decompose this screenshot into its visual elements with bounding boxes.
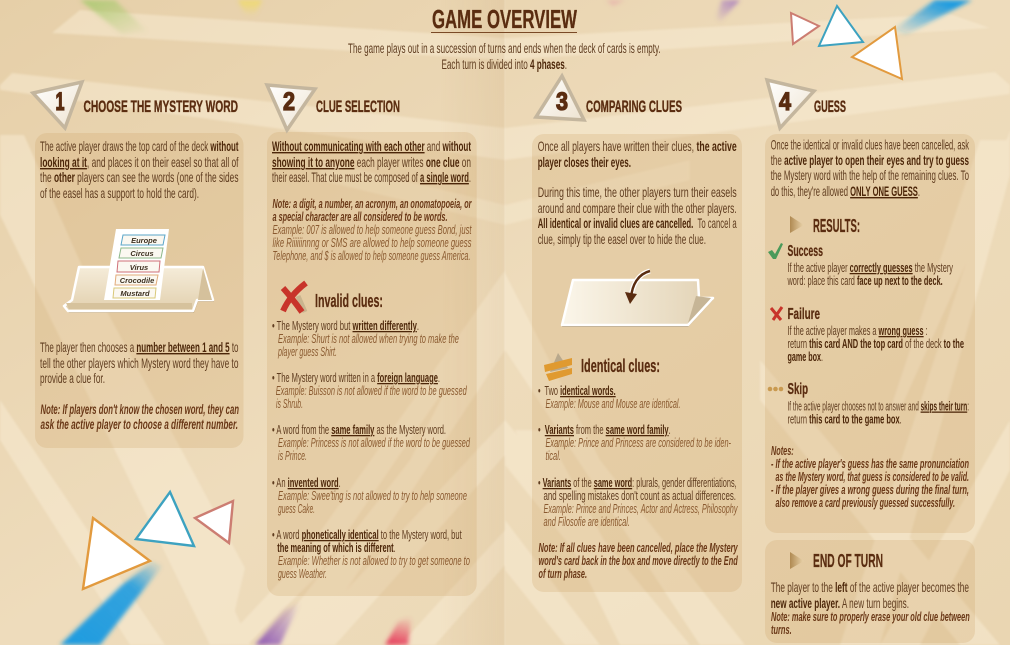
- title: GAME OVERVIEW: [432, 4, 577, 34]
- heading: choose the mystery word: CHOOSE THE MYSTERY WORD: [84, 97, 238, 116]
- result: skip: [788, 381, 969, 426]
- icon: red cross: [283, 283, 306, 312]
- identical clues list: tical.: [546, 449, 561, 463]
- identical clues list: • Variants from the same word family.: [538, 422, 671, 437]
- icon: red cross small: [771, 307, 782, 320]
- invalid clues list: Example: Shurt is not allowed when trying to make the: [278, 332, 459, 346]
- badge: step 2: [267, 85, 315, 130]
- top-right coloured triangles: [791, 6, 902, 79]
- invalid clues list: Example: Whether is not allowed to try to get someone to: [278, 554, 470, 568]
- icon: results arrow: [790, 216, 804, 233]
- icon: end of turn arrow: [790, 552, 804, 569]
- identical clues list: • Two identical words.: [538, 383, 616, 398]
- note and example: Note: a digit, a number, an acronym, an onomatopoeia, or: [272, 197, 472, 211]
- invalid clues list: • The Mystery word written in a foreign language.: [272, 370, 440, 385]
- heading: clue selection: CLUE SELECTION: [316, 97, 400, 116]
- heading: guess: GUESS: [814, 97, 846, 116]
- note and example: Example: 007 is allowed to help someone guess Bond, just: [272, 223, 472, 237]
- badge: step 1: 1: [56, 88, 65, 116]
- heading: comparing clues: COMPARING CLUES: [586, 97, 682, 116]
- body text: [538, 138, 737, 247]
- body text: Once all players have written their clues, the active: [538, 138, 737, 154]
- invalid clues list: is Prince.: [278, 449, 307, 463]
- invalid clues list: • A word from the same family as the Mystery word.: [272, 422, 446, 437]
- heading: invalid clues: Invalid clues:: [315, 291, 383, 311]
- identical clues list: and spelling mistakes don't count as actual differences.: [544, 488, 736, 503]
- invalid clues list: Example: Princess is not allowed if the word to be guessed: [278, 436, 471, 450]
- result: success: If the active player correctly guesses the Mystery: [788, 260, 953, 275]
- notes: [771, 444, 969, 510]
- identical clues list: Example: Prince and Princess are considered to be iden-: [546, 436, 731, 450]
- note: of turn phase.: [538, 567, 587, 581]
- body text: the other players can see the words (one of the sides: [40, 169, 238, 185]
- invalid clues list: • The Mystery word but written differently.: [272, 318, 419, 333]
- result: success: Success: [788, 243, 823, 260]
- result: skip: return this card to the game box.: [788, 412, 902, 426]
- result: failure: game box.: [788, 349, 823, 364]
- body text: of the easel has a support to hold the card).: [40, 185, 199, 201]
- result: failure: If the active player makes a wrong guess :: [788, 323, 928, 338]
- body text: number choice: tell the other players which Mystery word they have to: [40, 355, 239, 371]
- note and example: Telephone, and $ is allowed to help someone guess America.: [272, 249, 470, 263]
- identical clues list: [538, 383, 738, 529]
- icon: three dots: [768, 387, 783, 391]
- intro text: Each turn is divided into 4 phases.: [442, 57, 567, 72]
- badge: step 4: [767, 80, 814, 128]
- badge: step 1: [33, 82, 82, 128]
- body text: showing it to anyone each player writes one clue on: [272, 154, 471, 170]
- illustration: tipped easel with arrow: [562, 271, 713, 327]
- body text: Without communicating with each other and without: [272, 138, 471, 154]
- illustration: easel with card: Circus: [130, 249, 154, 258]
- note: [538, 541, 738, 581]
- invalid clues list: guess Weather.: [278, 567, 327, 581]
- result: failure: [788, 306, 964, 364]
- panel: end of turn: [765, 540, 975, 643]
- intro text: The game plays out in a succession of turns and ends when the deck of cards is empty.: [348, 41, 661, 56]
- body text: number choice: The player then chooses a number between 1 and 5 to: [40, 339, 239, 355]
- identical clues list: Example: Mouse and Mouse are identical.: [546, 397, 680, 411]
- body text: All identical or invalid clues are cancelled. To cancel a: [538, 215, 737, 231]
- body text: their easel. That clue must be composed of a single word.: [272, 169, 471, 185]
- invalid clues list: Example: Swee'ting is not allowed to try to help someone: [278, 489, 467, 503]
- panel: phase 4: [765, 80, 975, 533]
- result: failure: return this card AND the top card of the deck to the: [788, 336, 964, 351]
- identical clues list: Example: Prince and Princes, Actor and Actress, Philosophy: [544, 502, 738, 516]
- note: ask the active player to choose a different number.: [40, 416, 238, 432]
- body text: [771, 136, 970, 199]
- body text: new active player. A new turn begins.: [771, 595, 909, 611]
- body text: [771, 579, 970, 637]
- panel: phase 3: [532, 76, 742, 592]
- illustration: easel with card: Virus: [130, 263, 148, 272]
- result: skip: Skip: [788, 381, 808, 398]
- invalid clues list: • A word phonetically identical to the Mystery word, but: [272, 527, 462, 542]
- heading: results: RESULTS:: [813, 216, 860, 236]
- note and example: [272, 197, 472, 263]
- body text: number choice: provide a clue for.: [40, 370, 105, 386]
- panel: phase 2: [267, 85, 477, 596]
- bottom-left coloured triangles: [83, 492, 233, 589]
- note: [40, 401, 239, 432]
- badge: step 4: 4: [779, 88, 791, 116]
- invalid clues list: guess Cake.: [278, 502, 315, 516]
- icon: green check: [768, 243, 783, 259]
- body text: number choice: [40, 339, 239, 386]
- body text: around and compare their clue with the other players.: [538, 200, 737, 216]
- heading: identical clues: Identical clues:: [581, 356, 660, 376]
- panel: phase 1: [33, 82, 244, 448]
- note and example: like Riiiiiinnng or SMS are allowed to help someone guess: [272, 236, 472, 250]
- illustration: easel with card: [64, 229, 214, 313]
- invalid clues list: Example: Buisson is not allowed if the word to be guessed: [276, 384, 467, 398]
- body text: clue, simply tip the easel over to hide the clue.: [538, 231, 706, 247]
- badge: step 3: 3: [556, 88, 568, 116]
- identical clues list: • Variants of the same word: plurals, gender differentiations,: [538, 475, 737, 490]
- note and example: a special character are all considered to be words.: [272, 210, 448, 224]
- body text: do this, they're allowed ONLY ONE GUESS.: [771, 183, 920, 199]
- illustration: easel with card: Mustard: [120, 289, 150, 298]
- note: Note: If players don't know the chosen word, they can: [40, 401, 239, 417]
- body text: [40, 138, 239, 201]
- heading: end of turn: END OF TURN: [813, 551, 883, 571]
- invalid clues list: [272, 318, 471, 581]
- result: failure: Failure: [788, 306, 820, 323]
- badge: step 2: 2: [283, 88, 295, 116]
- icon: identical sign: [544, 353, 572, 381]
- identical clues list: and Filosofie are identical.: [544, 515, 630, 529]
- body text: looking at it, and places it on their easel so that all of: [40, 154, 239, 170]
- invalid clues list: player guess Shirt.: [277, 345, 337, 359]
- result: success: [787, 243, 953, 288]
- result: success: word: place this card face up next to the deck.: [787, 273, 943, 288]
- illustration: easel with card: Europe: [131, 236, 157, 245]
- body text: The active player draws the top card of the deck without: [40, 138, 239, 154]
- illustration: easel with card: Crocodile: [120, 276, 154, 285]
- note: word's card back in the box and move directly to the End: [538, 554, 738, 568]
- body text: During this time, the other players turn their easels: [538, 184, 737, 200]
- invalid clues list: • An invented word.: [272, 475, 341, 490]
- body text: turns.: [771, 623, 792, 637]
- body text: [272, 138, 471, 185]
- badge: step 3: [536, 76, 584, 120]
- notes: Notes:: [771, 444, 794, 458]
- intro text: [348, 41, 661, 72]
- invalid clues list: is Shrub.: [276, 397, 303, 411]
- invalid clues list: the meaning of which is different.: [277, 540, 396, 555]
- body text: player closes their eyes.: [538, 154, 631, 170]
- note: Note: If all clues have been cancelled, place the Mystery: [538, 541, 738, 555]
